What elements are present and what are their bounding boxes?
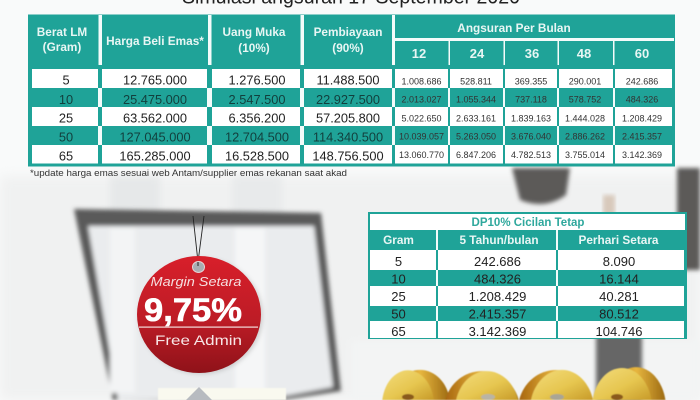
row 5 gram: 242.686: [626, 76, 658, 86]
table header labels: 48: [577, 46, 591, 61]
row 10 gram: 484.326: [626, 94, 658, 104]
row values: 10: [391, 272, 406, 286]
row 65 gram: 6.847.206: [456, 150, 496, 160]
row 25 gram: 2.633.161: [456, 114, 496, 124]
row values: 2.415.357: [469, 306, 526, 322]
row 10 gram: 2.547.500: [229, 92, 285, 107]
main simulation table: [28, 14, 675, 166]
row 25 gram: 1.208.429: [622, 114, 662, 124]
white rows: [370, 250, 684, 338]
row values: 50: [391, 306, 406, 322]
table header labels: 36: [525, 46, 539, 61]
row 25 gram: 63.562.000: [123, 110, 187, 126]
row 5 gram: 11.488.500: [316, 72, 380, 88]
row 65 gram: 16.528.500: [225, 148, 289, 164]
row 25 gram: [59, 110, 662, 126]
row 65 gram: 13.060.770: [399, 150, 444, 160]
column dividers in header: [436, 230, 558, 321]
table header labels: Harga Beli Emas*: [106, 34, 204, 48]
row 25 gram: 25: [59, 110, 73, 126]
tag eyelet: [192, 262, 204, 272]
header labels: Perhari Setara: [578, 233, 659, 247]
row 5 gram: 1.008.686: [401, 76, 442, 86]
row 5 gram: 528.811: [460, 76, 492, 86]
row values: 65: [391, 324, 406, 339]
table header labels: (Gram): [43, 40, 81, 54]
row values: 1.208.429: [469, 289, 526, 304]
row 5 gram: 5: [62, 72, 70, 88]
table header labels: Pembiayaan: [314, 25, 382, 39]
table header labels: [37, 21, 649, 61]
table header labels: 60: [635, 46, 649, 61]
row 5 gram: 290.001: [569, 76, 601, 86]
row values: [391, 254, 642, 339]
row 65 gram: 165.285.000: [119, 148, 191, 164]
row 65 gram: [59, 148, 662, 164]
row 50 gram: 12.704.500: [225, 130, 289, 144]
row 65 gram: 4.782.513: [511, 150, 551, 160]
row 50 gram: [59, 130, 662, 144]
row 5 gram: 369.355: [515, 76, 547, 86]
header labels: Gram: [383, 233, 414, 247]
row 10 gram: [59, 92, 658, 107]
row 50 gram: 114.340.500: [313, 130, 383, 144]
white separators on teal rows: [98, 88, 615, 145]
dark blurred objects behind the table: [512, 168, 700, 400]
row values: 8.090: [603, 254, 635, 269]
row 5 gram: 1.276.500: [229, 72, 285, 88]
row values: 25: [391, 289, 406, 304]
table header labels: (90%): [332, 41, 364, 55]
tag body: [137, 256, 261, 373]
row 50 gram: 5.263.050: [456, 132, 496, 142]
row 25 gram: 6.356.200: [229, 110, 285, 126]
footnote: *update harga emas sesuai web Antam/supplier emas rekanan saat akad: [30, 167, 347, 178]
tag divider: [139, 326, 258, 328]
row values: 3.142.369: [469, 324, 526, 339]
price tag: [137, 216, 263, 374]
row 10 gram: 737.118: [515, 94, 547, 104]
header labels: [383, 233, 659, 247]
row 65 gram: 65: [59, 148, 73, 164]
row 50 gram: 50: [59, 130, 73, 144]
gold 3D zeros: [382, 367, 665, 400]
table title: DP10% Cicilan Tetap: [472, 217, 584, 229]
table header labels: Berat LM: [37, 25, 87, 39]
table header dividers: [98, 15, 674, 65]
row 10 gram: 25.475.000: [123, 92, 187, 107]
row 10 gram: 10: [59, 92, 73, 107]
table: DP10% fixed instalments: [368, 212, 687, 339]
laptop stand highlight: [158, 387, 286, 400]
row 25 gram: 57.205.800: [316, 110, 380, 126]
row 65 gram: 3.142.369: [622, 150, 662, 160]
row values: 16.144: [599, 272, 639, 286]
tag shadow: [139, 258, 263, 374]
row values: 80.512: [599, 306, 639, 322]
row values: 40.281: [599, 289, 639, 304]
row 10 gram: 578.752: [569, 94, 601, 104]
table header labels: Uang Muka: [223, 25, 286, 39]
row 50 gram: 127.045.000: [119, 130, 191, 144]
row 50 gram: 10.039.057: [399, 132, 444, 142]
row 10 gram: 22.927.500: [316, 92, 380, 107]
row 50 gram: 3.676.040: [511, 132, 551, 142]
laptop screen frame: [74, 209, 341, 400]
table header labels: 24: [470, 46, 485, 61]
row values: 5: [395, 254, 402, 269]
white row cells: [32, 69, 672, 164]
row values: 484.326: [474, 272, 521, 286]
table header labels: 12: [412, 46, 426, 61]
table header labels: (10%): [238, 41, 270, 55]
row 50 gram: 2.886.262: [565, 132, 605, 142]
row 10 gram: 1.055.344: [456, 94, 496, 104]
row values: 104.746: [596, 324, 642, 339]
tag footer: Free Admin: [155, 332, 242, 348]
row 10 gram: 2.013.027: [401, 94, 442, 104]
row values: 242.686: [474, 254, 521, 269]
tag value: 9,75%: [144, 292, 242, 328]
row 5 gram: [62, 72, 658, 88]
row 25 gram: 1.444.028: [565, 114, 605, 124]
tag strings: [193, 216, 204, 262]
row 5 gram: 12.765.000: [123, 72, 187, 88]
row 25 gram: 1.839.163: [511, 114, 551, 124]
table title: [370, 214, 685, 230]
row 65 gram: 148.756.500: [312, 148, 384, 164]
row 25 gram: 5.022.650: [401, 114, 442, 124]
table header labels: Angsuran Per Bulan: [457, 21, 571, 35]
row 50 gram: 2.415.357: [622, 132, 662, 142]
tag label: Margin Setara: [150, 275, 242, 289]
header labels: 5 Tahun/bulan: [459, 233, 539, 247]
row 65 gram: 3.755.014: [565, 150, 605, 160]
